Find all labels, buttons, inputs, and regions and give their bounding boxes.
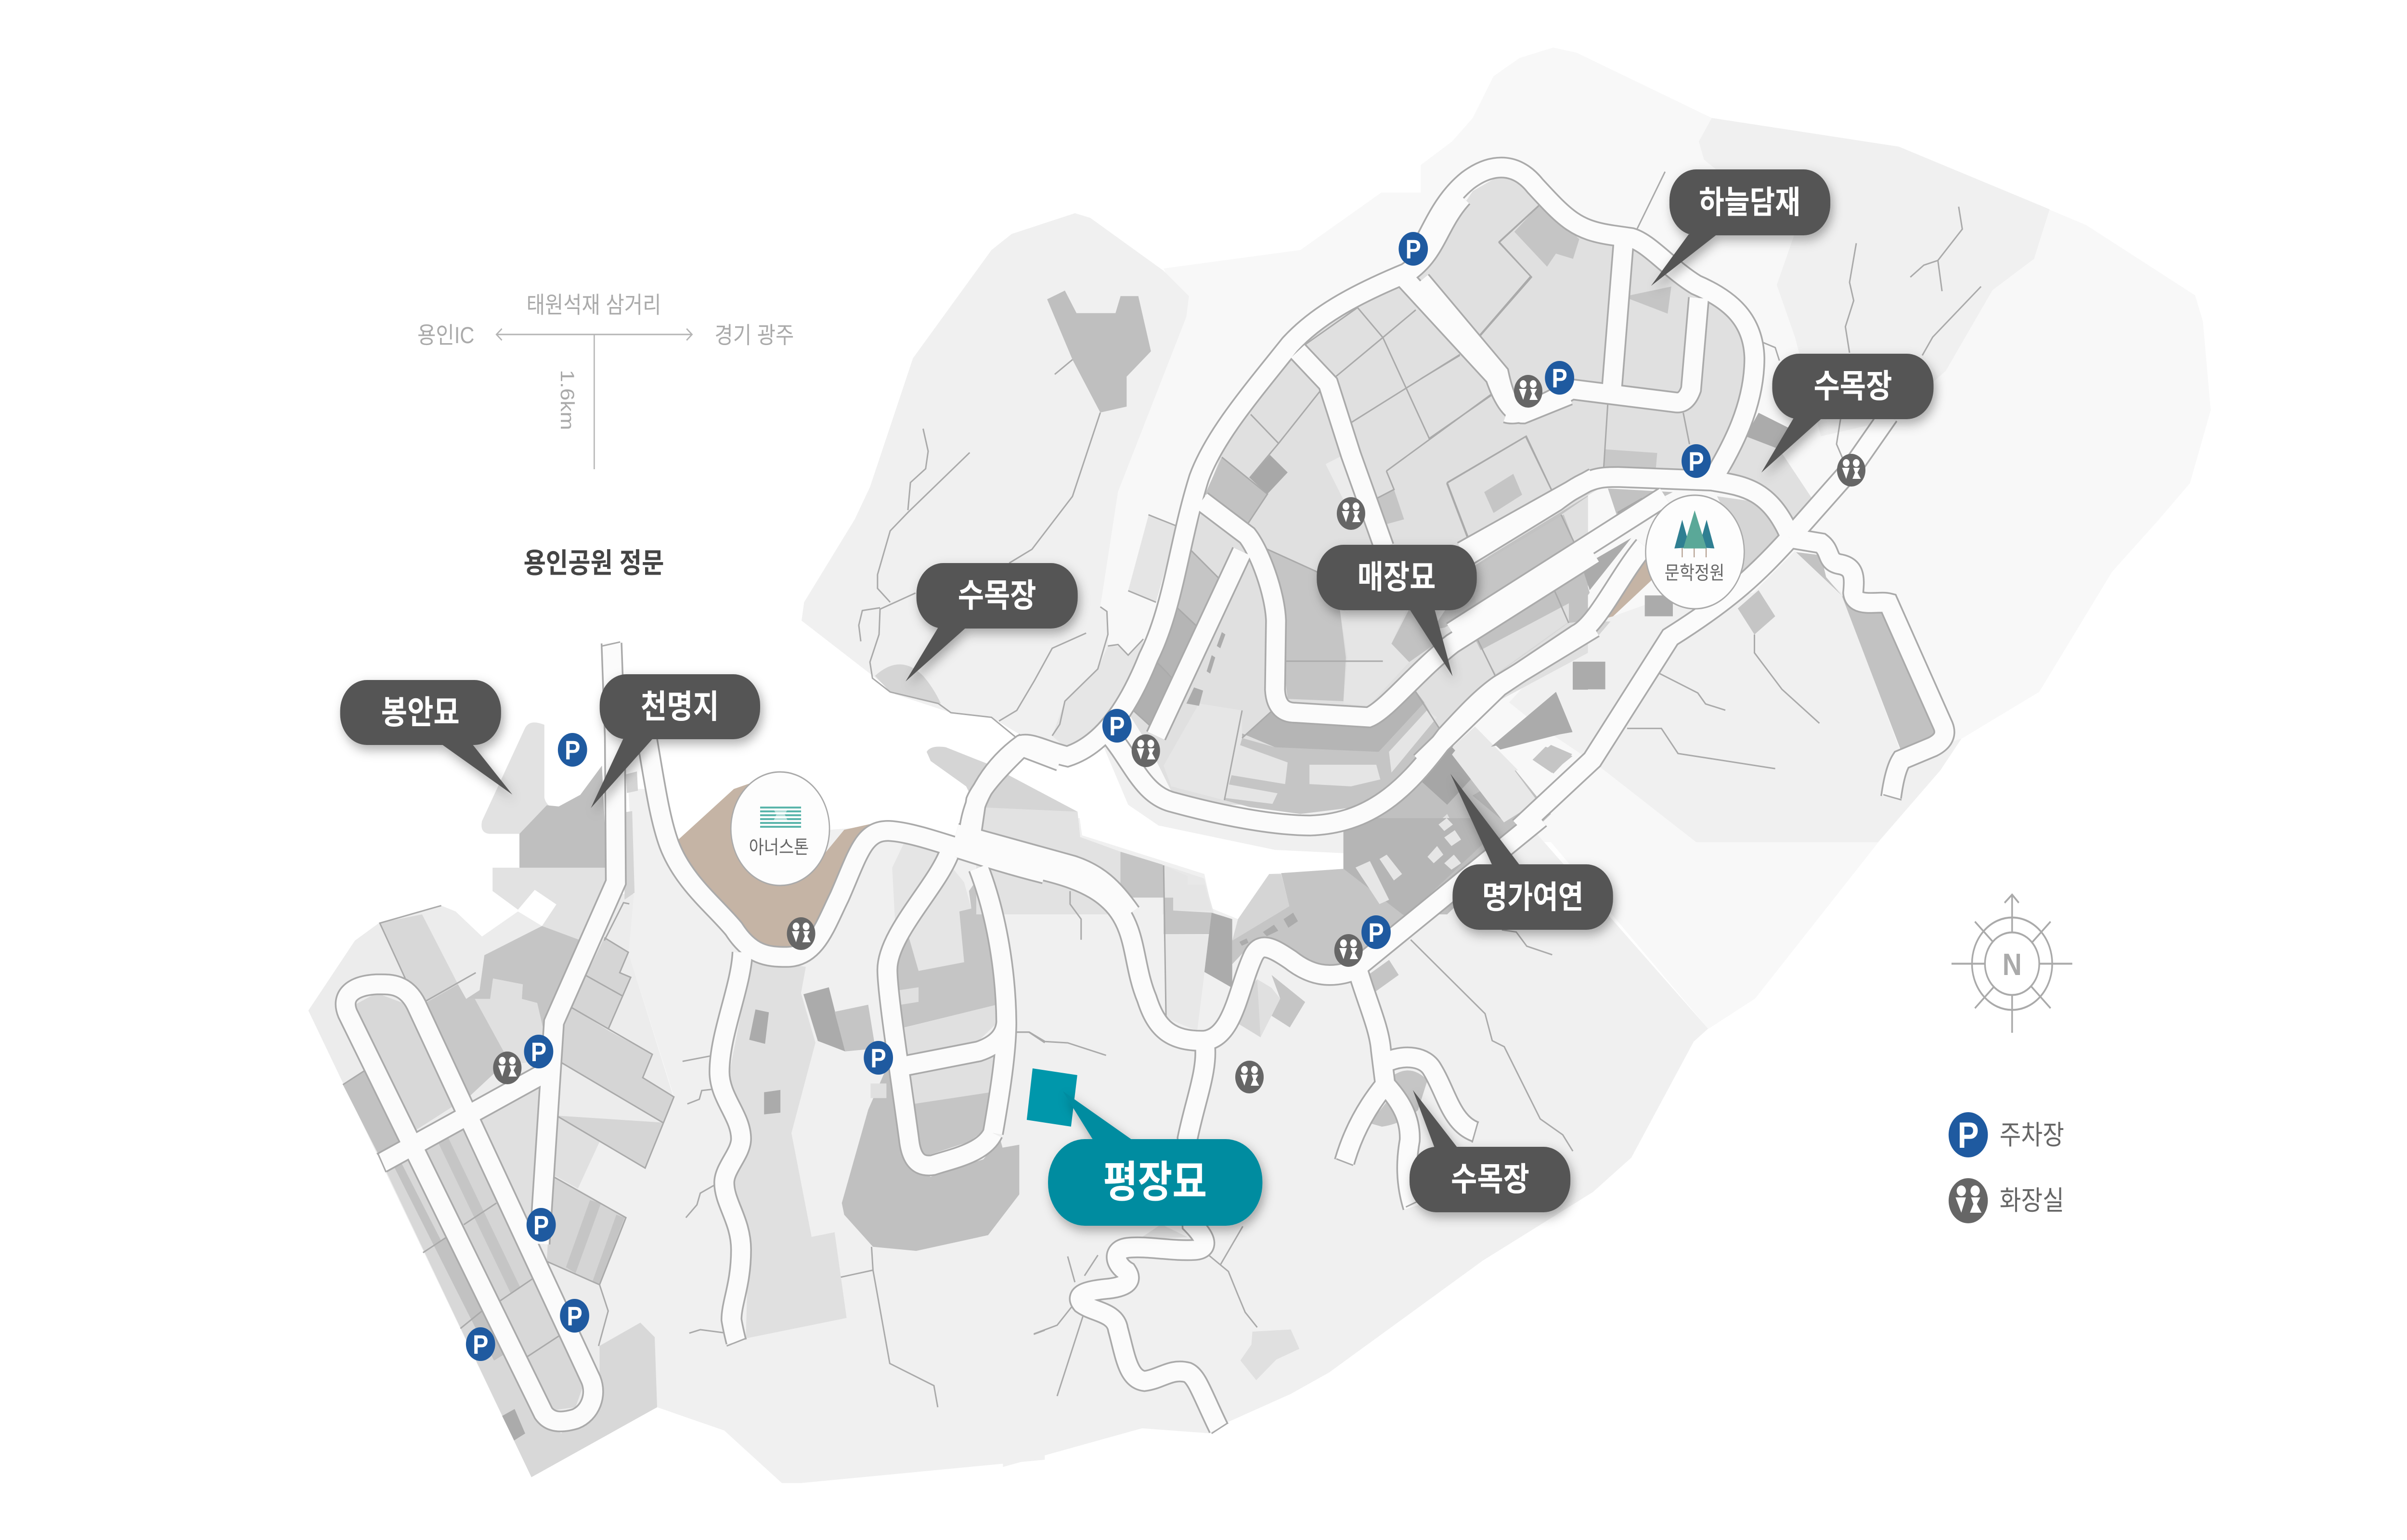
road network surface [346, 167, 1944, 1428]
callout: 봉안묘: 봉안묘 [381, 694, 460, 731]
compass rose: N [2003, 947, 2022, 982]
callout: 평장묘: 평장묘 [1103, 1158, 1207, 1206]
parking icons: P [533, 1211, 549, 1241]
building blocks and plots, south section [1120, 818, 1488, 1380]
landmark: 문학정원 [1645, 495, 1744, 609]
legend: 화장실: 화장실 [2000, 1186, 2064, 1216]
direction diagram: roads to entrance: 태원석재 삼거리 [527, 292, 661, 318]
landmark: 아너스톤 [731, 772, 829, 886]
parking icons: P [565, 736, 580, 766]
parking icons [466, 232, 1711, 1361]
parking icons: P [1552, 364, 1567, 394]
direction diagram: roads to entrance [417, 292, 794, 469]
parking icons: P [473, 1330, 488, 1360]
legend: 주차장: 주차장 [2000, 1121, 2064, 1151]
callout: 평장묘 [1048, 1091, 1262, 1226]
callout: 수목장 (west hill): 수목장 [958, 578, 1036, 614]
direction diagram: roads to entrance: 1.6km [556, 370, 578, 430]
building blocks and plots, north-east section [1421, 170, 1935, 822]
compass rose [1952, 895, 2072, 1033]
building blocks and plots, north section [875, 192, 1588, 914]
building blocks and plots, west section [309, 722, 1019, 1477]
parking icons: P [1109, 712, 1125, 742]
legend: 주차장 [1949, 1112, 2064, 1157]
parking icons: P [1406, 235, 1421, 265]
legend: 화장실 [1949, 1178, 2064, 1223]
parking icons: P [1368, 918, 1384, 948]
callout: 천명지: 천명지 [641, 689, 719, 725]
callout: 수목장 (west hill) [906, 563, 1078, 681]
thin paths and block outlines [343, 172, 1981, 1407]
parking icons: P [1688, 447, 1704, 477]
callout: 매장묘: 매장묘 [1358, 559, 1436, 596]
road end caps [378, 642, 1902, 1434]
direction diagram: roads to entrance: 용인IC [417, 322, 474, 348]
callout: 명가여연: 명가여연 [1482, 880, 1583, 915]
callout: 수목장 (south) [1410, 1090, 1570, 1212]
callout: 명가여연 [1450, 774, 1613, 930]
label: 용인공원 정문: 용인공원 정문 [524, 548, 664, 579]
callout: 매장묘 [1317, 545, 1477, 676]
callout: 수목장 (east): 수목장 [1814, 368, 1892, 405]
direction diagram: roads to entrance: 경기 광주 [714, 322, 794, 348]
marker: 평장묘 plot [1027, 1068, 1077, 1127]
legend: 주차장: P [1958, 1116, 1979, 1156]
callout: 봉안묘 [340, 680, 512, 795]
callout: 수목장 (south): 수목장 [1451, 1161, 1529, 1198]
callout: 수목장 (east) [1761, 354, 1933, 473]
background terrain [578, 48, 2211, 1483]
landmark: 아너스톤: 아너스톤 [749, 837, 809, 858]
callout: 하늘담재: 하늘담재 [1699, 185, 1800, 220]
callout: 천명지 [591, 674, 760, 808]
road network outline [346, 167, 1944, 1428]
restroom icons [493, 375, 1865, 1093]
callout: 하늘담재 [1651, 169, 1830, 286]
landmark: 문학정원: 문학정원 [1665, 563, 1724, 584]
parking icons: P [870, 1044, 886, 1074]
parking icons: P [567, 1302, 582, 1332]
parking icons: P [531, 1038, 546, 1067]
